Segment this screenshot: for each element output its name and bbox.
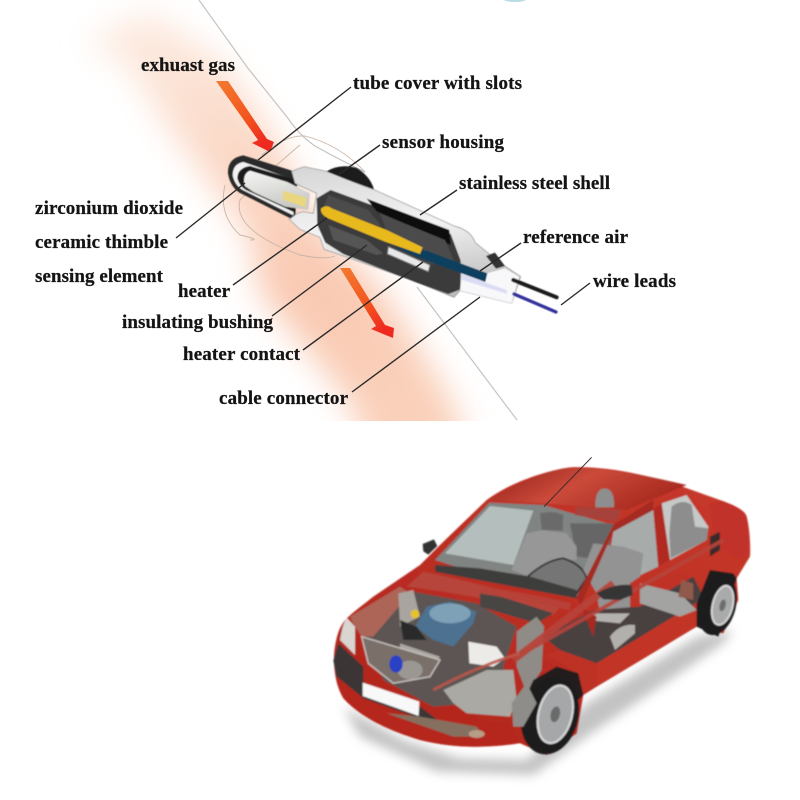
label: heater contact: heater contact	[183, 344, 301, 365]
rear tyre	[692, 571, 743, 639]
engine cover blue	[415, 602, 477, 647]
sensor hex nut	[327, 166, 374, 189]
inner cavity	[233, 162, 295, 215]
label: insulating bushing: insulating bushing	[122, 312, 274, 333]
arrow: exhaust gas in	[216, 81, 274, 152]
label: exhaust gas: exhuast gas	[141, 55, 235, 76]
pipe wall lower line	[417, 287, 517, 420]
engine bay dark	[363, 590, 517, 707]
arrow: exhaust gas out	[340, 268, 394, 338]
gasket thin outlines	[223, 136, 365, 258]
label: wire leads: wire leads	[593, 271, 676, 292]
ground shadow	[343, 630, 733, 775]
insulating bushing lower	[328, 225, 383, 255]
roof panel	[490, 468, 687, 510]
brake and suspension parts	[512, 683, 537, 727]
shaft and head	[216, 81, 274, 152]
labels	[35, 55, 676, 409]
dark blue wire	[393, 247, 487, 282]
front lower bumper dark	[333, 643, 447, 727]
door seat bottom	[610, 625, 635, 650]
front seat left	[512, 530, 577, 577]
rear headrest	[595, 488, 614, 507]
insulating bushing upper	[323, 195, 382, 227]
leader: stainless shell	[420, 190, 457, 215]
leader: cable connector	[352, 297, 480, 392]
leader: insulating bushing	[272, 245, 367, 316]
front wheel	[513, 671, 587, 761]
steering wheel and dash	[528, 558, 587, 593]
bumper translucent intake	[387, 713, 483, 737]
leader: heater	[233, 218, 327, 285]
rear rim	[708, 583, 737, 627]
front seat right	[583, 543, 643, 613]
blue reservoir	[389, 655, 403, 673]
front strut left	[398, 590, 420, 627]
crankshaft pulley	[397, 661, 423, 679]
leader: tube cover	[258, 87, 351, 160]
a pillar	[577, 500, 653, 637]
hood left pink panel	[350, 587, 410, 637]
antenna line	[544, 457, 592, 507]
leader: sensor housing	[338, 145, 380, 175]
leader: wire leads	[561, 283, 590, 305]
label: reference air: reference air	[523, 227, 629, 248]
hood red band	[407, 572, 560, 615]
leader: reference air	[480, 243, 521, 271]
rear wheel	[692, 571, 743, 639]
dashboard	[435, 565, 577, 598]
front tyre	[513, 671, 587, 761]
front rim	[532, 682, 579, 747]
rear door window	[662, 495, 708, 560]
teal fragment at top edge	[502, 0, 528, 2]
wing mirror right	[597, 585, 633, 600]
front fender red	[547, 649, 597, 695]
front grille	[362, 637, 440, 683]
intake manifold	[400, 643, 440, 673]
engine black parts	[400, 620, 427, 640]
front wheel arch	[517, 667, 583, 743]
door pillar	[653, 503, 670, 567]
gearbox machinery	[443, 670, 517, 717]
cable blue lead	[514, 294, 556, 312]
leader lines	[176, 87, 590, 392]
headlight	[340, 618, 355, 655]
label: tube cover: tube cover with slots	[353, 73, 522, 94]
front hub	[549, 705, 562, 723]
label: sensor housing: sensor housing	[382, 132, 504, 153]
label: cable connector: cable connector	[219, 388, 349, 409]
translucent door streak b	[513, 583, 613, 660]
insulating bushing rear	[380, 213, 457, 267]
rear bench seat	[570, 523, 613, 560]
label: heater: heater	[178, 281, 231, 302]
peach gas gradient, clipped at the bottom edge	[85, 10, 470, 460]
white rear crimp	[460, 268, 519, 303]
rear wheel arch	[697, 570, 737, 637]
floor beam grey	[640, 583, 697, 617]
yellow heater rod	[321, 206, 423, 254]
redo blue strip over crimp	[427, 253, 487, 282]
dark crimp ring	[486, 253, 505, 269]
inner metal cavity	[317, 190, 461, 294]
door sill red	[597, 607, 707, 687]
ceramic thimble	[244, 171, 310, 210]
sensor housing body	[289, 167, 521, 303]
engine bay upper dark	[480, 590, 553, 623]
exhaust pipe: gas flow band	[93, 0, 518, 421]
bumper red lower	[337, 677, 517, 747]
translucent door streak a	[517, 540, 723, 657]
license plate	[363, 683, 419, 716]
pipe wall upper line	[199, 0, 365, 172]
sensor cutaway	[228, 155, 557, 312]
leader: heater contact	[303, 262, 423, 350]
label: ceramic thimble: ceramic thimble	[35, 232, 168, 253]
engine cover round filter	[429, 603, 471, 623]
tube cover with slots	[228, 155, 297, 221]
cabin glass	[435, 503, 613, 597]
car cutaway illustration	[333, 457, 750, 775]
battery	[468, 642, 505, 667]
label: sensing element: sensing element	[35, 266, 164, 287]
sensing element	[283, 191, 307, 207]
car body shell	[334, 467, 750, 755]
cavity dark gap	[237, 166, 297, 213]
front seat left headrest	[540, 512, 563, 531]
fog lamp	[469, 730, 485, 738]
label: zirconium dioxide: zirconium dioxide	[35, 198, 183, 219]
shaft and head	[340, 268, 394, 338]
label: stainless steel shell: stainless steel shell	[459, 173, 610, 194]
engine bay red tube	[433, 653, 520, 690]
wing mirror left	[423, 539, 437, 555]
suspension strut	[517, 617, 544, 693]
cable black lead	[513, 280, 557, 297]
rear seat through window	[669, 502, 708, 558]
cabin floor dark	[543, 577, 703, 663]
reference air band	[461, 274, 507, 294]
rear hub	[718, 599, 727, 612]
door handle panel	[710, 532, 720, 557]
leader: ceramic thimble	[176, 183, 245, 238]
oil cap yellow	[411, 610, 419, 618]
windshield tint	[445, 506, 533, 565]
rear coil spring	[678, 580, 693, 600]
hood red streak	[480, 590, 570, 607]
rear quarter panel	[710, 501, 749, 560]
black air gap	[367, 199, 451, 245]
rear seat top	[575, 507, 622, 522]
heater contact	[387, 247, 430, 272]
front door window	[603, 510, 658, 593]
seat cushion	[587, 613, 630, 623]
